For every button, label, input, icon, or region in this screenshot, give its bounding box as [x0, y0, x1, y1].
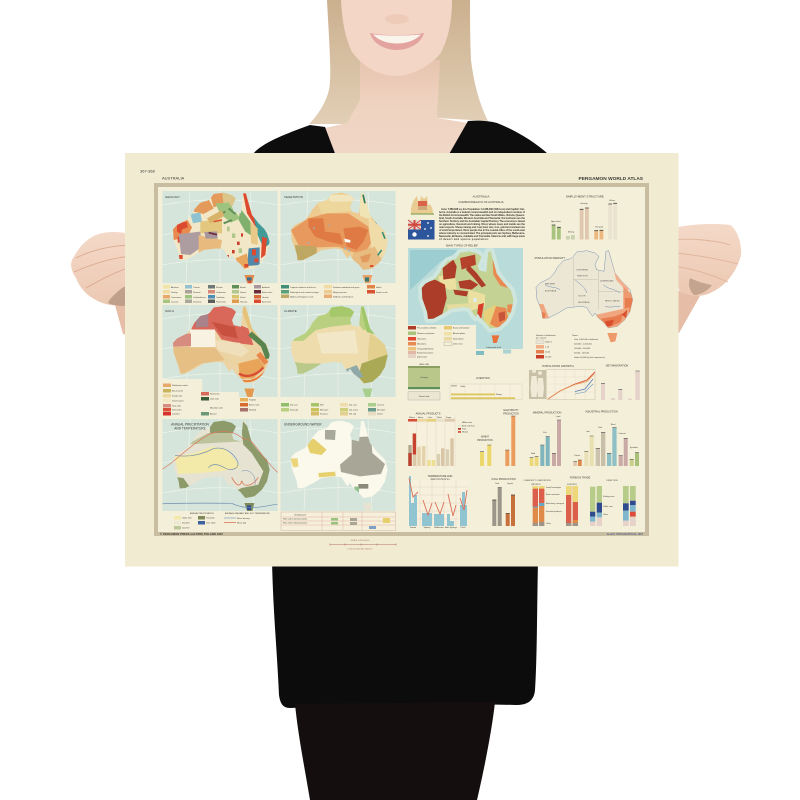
- mineral production heading: MINERAL PRODUCTION: [533, 412, 561, 414]
- relief legend: Volcanoes: [417, 338, 426, 340]
- underground water table: Water used for domestic purposes: [283, 518, 307, 520]
- population density legend: Towns:: [572, 335, 579, 337]
- chart: imports and exports by commodity: IMPORTS: [531, 484, 541, 486]
- soils legend: Laterites: [172, 412, 180, 416]
- chart: imports and exports by commodity: Food, beverages: [546, 487, 561, 489]
- chart: trade direction: Sterling area: [603, 495, 615, 498]
- geology legend: Triassic: [193, 287, 200, 289]
- chart: industrial production: Synthetic: [630, 446, 638, 449]
- soils legend: [162, 379, 259, 416]
- panel: underground water map: [280, 419, 396, 512]
- panel: annual precipitation and temperature map: [162, 419, 278, 511]
- chart: annual products: [408, 415, 455, 468]
- soils legend: Brown soils: [249, 404, 259, 406]
- precipitation legend: AVERAGE JANUARY AND JULY TEMPERATURE: [225, 512, 270, 515]
- geology legend: Jurassic: [171, 301, 178, 303]
- map: population density: NORTHERN: [577, 270, 588, 272]
- population density legend: Under 50,000 (by their importance): [574, 356, 605, 359]
- underground water heading: UNDERGROUND WATER: [284, 422, 322, 426]
- map: population density: AUSTRALIA: [545, 289, 557, 292]
- text block: country description: where industry is concentrated. The principal ports are Sydney, Melbourne,: [439, 231, 525, 235]
- text block: country description: Newcastle, Brisbane, Adelaide and Fremantle. Inland is arid, with large areas: [439, 234, 526, 238]
- chart: mineral production: Gold: [531, 453, 535, 455]
- soils legend: Red loams: [210, 394, 220, 396]
- climate legend: Mountain: [377, 408, 385, 412]
- chart: net immigration: [601, 371, 640, 400]
- panel: geology map: [162, 191, 278, 284]
- chart: industrial production: Cement: [618, 432, 626, 435]
- chart: employment structure: Others: [609, 199, 615, 202]
- geology legend: Schist: [240, 296, 246, 299]
- vegetation legend: Subtropical and coastal eucalypt: [290, 291, 319, 294]
- electricity heading: ELECTRICITY: [504, 410, 519, 412]
- soils legend: Alluvial: [210, 412, 217, 416]
- left hand and arm: [115, 300, 130, 336]
- population density legend: 500,000 - 1,000,000: [574, 344, 593, 346]
- panel: relief map: [408, 248, 523, 358]
- chart: temperature and precipitation: [408, 476, 468, 529]
- nose: [385, 14, 409, 24]
- vegetation legend: Tropical rainforest and forest: [290, 286, 316, 289]
- soils legend: Mountain soils: [210, 406, 223, 410]
- relief legend: Pre-Cambrian shields: [417, 328, 436, 330]
- chart: imports and exports by commodity: Finished products: [546, 510, 562, 513]
- map frame: [156, 185, 647, 534]
- country title: AUSTRALIA: [473, 194, 489, 198]
- map: population density: AUSTRALIA: [578, 301, 590, 304]
- chart: population growth: [547, 370, 595, 400]
- soils legend: Sandy soils: [172, 396, 182, 398]
- precipitation legend: Mean July: [237, 522, 246, 524]
- poster sheet: [125, 153, 678, 566]
- population density legend: Over 1,000,000 inhabitants: [574, 338, 598, 341]
- annual products legend: Mutton: [462, 430, 468, 434]
- relief legend: Depression: [417, 356, 427, 358]
- scale bar: [330, 539, 396, 550]
- black dress below poster: [272, 560, 538, 708]
- tights: [295, 702, 495, 800]
- annual precipitation heading: ANNUAL PRECIPITATION: [171, 422, 210, 426]
- geology legend: Basalt: [240, 286, 246, 289]
- black top: [253, 121, 548, 156]
- precipitation legend: Over 1000: [206, 522, 216, 524]
- geology legend: Proterozoic: [216, 300, 226, 303]
- chart: employment structure: Agriculture: [551, 220, 562, 223]
- chart: trade direction: [590, 480, 636, 526]
- relief legend: Limit of ice: [453, 342, 463, 346]
- industrial production heading: INDUSTRIAL PRODUCTION: [585, 410, 618, 414]
- mouth: [370, 33, 424, 50]
- page number: 367-368: [140, 168, 155, 174]
- map: population density: TERRITORY: [577, 275, 589, 277]
- precipitation legend: 250-500: [182, 522, 190, 524]
- climate legend: Dry, warm: [349, 410, 358, 412]
- soils legend: Podzols: [249, 400, 256, 402]
- chart: imports and exports by commodity: Machinery, transport: [546, 502, 565, 505]
- map: population density: QUEENSLAND: [600, 279, 614, 282]
- chart: mineral production: Lead: [556, 416, 560, 418]
- geology legend: Granite: [262, 296, 269, 299]
- electricity subheading: PRODUCTION: [503, 414, 519, 416]
- soils legend: Grey soils: [172, 406, 181, 408]
- temperature and precipitation heading: TEMPERATURE AND: [428, 475, 452, 478]
- underground water table: Underground: [294, 514, 306, 516]
- chart: annual products: Wheat: [409, 416, 415, 419]
- chart: trade direction: Dollar area: [603, 506, 614, 508]
- annual products legend: Million tons: [462, 421, 472, 424]
- geology legend: Andesite: [262, 286, 271, 289]
- panel: vegetation map: [280, 191, 396, 284]
- map: population density: SOUTH: [578, 295, 586, 297]
- copyright line: © PERGAMON PRESS and PWN, POLAND 1967: [160, 532, 223, 536]
- map: population density: NEW S. WALES: [605, 299, 620, 302]
- soils legend: Red earths: [172, 408, 182, 412]
- vegetation legend: Savanna woodland and grass: [333, 287, 359, 289]
- right hand and arm: [676, 290, 700, 333]
- wheat production heading: WHEAT: [481, 436, 490, 438]
- flag: Australia: [408, 220, 434, 240]
- chart: employment structure: Transport: [595, 226, 604, 228]
- precipitation legend: ANNUAL PRECIPITATION: [190, 512, 214, 515]
- geology legend: Tertiary: [171, 291, 178, 294]
- soils legend: Desert loams: [172, 400, 184, 402]
- chart: electricity production: [505, 416, 515, 466]
- chart: coal production: Lignite: [507, 482, 514, 485]
- climate legend: [281, 403, 385, 416]
- precipitation legend: Mean January: [237, 518, 250, 520]
- scale bar: 0 200 400 600 800 1000 km: [348, 548, 373, 550]
- population density legend: Number of inhabitants: [536, 334, 556, 337]
- population density heading: POPULATION DENSITY: [535, 256, 565, 260]
- chart: trade direction: DIRECTION: [606, 480, 618, 482]
- underground water table: [281, 512, 396, 530]
- chart: employment structure: Mining: [568, 232, 574, 234]
- geology legend: Carboniferous: [193, 297, 206, 299]
- text block: country description: of desert and sparse population.: [439, 237, 489, 241]
- chart: temperature and precipitation: Alice Springs: [445, 526, 457, 529]
- wheat production subheading: PRODUCTION: [477, 440, 493, 442]
- chart: industrial production: Iron: [586, 431, 590, 433]
- chart: industrial production: Cotton: [574, 454, 580, 457]
- population density legend: 50,000 - 100,000: [574, 352, 590, 354]
- geology legend: Ordovician: [216, 292, 226, 294]
- precipitation legend: 750-1000: [206, 518, 215, 520]
- soils legend: Red-brown earths: [172, 384, 188, 387]
- text block: country description: Area: 7,686,848 sq. km. Population: 11,186,000 (1964 est.) and Capital: Can-: [441, 207, 525, 211]
- text block: country description: Northern Territory and the Australian Capital Territory. The economy is based: [439, 219, 525, 223]
- chart: mineral production: Zinc: [543, 432, 547, 434]
- relief legend: Continental shelf: [486, 346, 501, 349]
- population growth heading: POPULATION GROWTH: [542, 364, 574, 368]
- vegetation legend: Desert scrub: [376, 291, 388, 294]
- chart: imports and exports by commodity: Basic materials: [546, 493, 560, 496]
- chart: industrial production: Steel: [611, 423, 616, 426]
- text block: country description: on agriculture, livestock and mining. Wool, wheat, meat, and metals are the: [439, 222, 526, 226]
- chart: temperature and precipitation: Perth: [461, 526, 465, 529]
- neck and chest: [325, 60, 468, 156]
- chart: coal production: [492, 482, 515, 526]
- population density legend: 10-25: [545, 352, 551, 354]
- relief legend: Young folded belts: [417, 348, 433, 350]
- climate legend: Monsoon: [320, 410, 328, 412]
- vegetation legend: Mallee and brigalow scrub: [290, 296, 314, 298]
- geology legend: Alluvium: [171, 286, 179, 289]
- soils legend: Black earths: [172, 390, 183, 392]
- relief legend: Alluvial plains: [453, 332, 465, 335]
- chart: industrial production: Coal: [598, 427, 603, 429]
- chart: imports and exports by commodity: EXPORTS: [567, 484, 577, 486]
- climate legend: Wet: [320, 404, 324, 406]
- scale bar: SCALE 1:40,000,000: [351, 539, 370, 542]
- map: population density: [535, 251, 634, 342]
- chart: annual products: Sugar: [446, 417, 452, 419]
- chart: wheat production: [480, 445, 491, 466]
- chart: rock section: Grazing: [420, 377, 428, 379]
- chart: employment structure: [551, 199, 617, 240]
- geology legend: Volcanic: [240, 301, 247, 303]
- relief heading: MAIN TYPES OF RELIEF: [446, 244, 478, 248]
- chart: annual products: Maize: [418, 417, 424, 419]
- relief legend: Mountains: [417, 342, 426, 346]
- annual products legend: [458, 421, 475, 434]
- population density legend: 1-10: [545, 346, 550, 348]
- climate legend: Dry cool: [290, 404, 298, 406]
- panel: soils map: [162, 305, 278, 398]
- atlas title: PERGAMON WORLD ATLAS: [578, 176, 644, 182]
- map: population density: WESTERN: [545, 284, 555, 286]
- population density legend: [536, 334, 605, 359]
- geology legend: Basic rocks: [262, 292, 272, 294]
- chart: imports and exports by commodity: Other: [546, 522, 551, 525]
- chart: livestock: Cattle: [460, 385, 466, 388]
- chart: imports and exports by commodity: COMMODITY COMPOSITION: [523, 480, 551, 482]
- annual products heading: ANNUAL PRODUCTS: [416, 412, 441, 415]
- chart: livestock: Sheep: [496, 394, 503, 396]
- vegetation legend: [281, 285, 388, 298]
- face: [341, 0, 452, 76]
- geology heading: GEOLOGY: [165, 195, 180, 199]
- page heading: Australia: AUSTRALIA: [162, 176, 185, 180]
- temperature and precipitation subheading: PRECIPITATION: [431, 478, 450, 482]
- coat of arms: [411, 196, 434, 215]
- hair: [309, 0, 488, 124]
- chart: temperature and precipitation: Melbourne: [434, 527, 445, 529]
- climate legend: Semi-dry: [290, 410, 298, 412]
- chart: temperature and precipitation: Sydney: [424, 527, 430, 529]
- geology legend: Silurian: [216, 287, 223, 289]
- chart: rock section: Desert land: [419, 395, 429, 398]
- population density legend: Under 1: [545, 342, 553, 344]
- geology legend: Devonian: [193, 301, 201, 303]
- chart: annual products: Oats: [428, 416, 432, 419]
- text block: country description: land, South Australia, Western Australia and Tasmania; the territories are the: [439, 216, 526, 220]
- climate legend: Oceanic: [377, 404, 384, 406]
- soils legend: Skeletal: [249, 408, 257, 412]
- chart: livestock: [450, 384, 522, 400]
- precipitation legend: [174, 512, 270, 530]
- panel: climate map: [280, 304, 396, 398]
- country subtitle: COMMONWEALTH OF AUSTRALIA: [458, 200, 504, 204]
- livestock heading: LIVESTOCK: [476, 377, 490, 380]
- chart: annual products: Wool: [437, 417, 442, 419]
- geology legend: Gneiss: [240, 292, 246, 294]
- precipitation legend: Under 250: [182, 518, 192, 520]
- climate legend: Hot, dry: [349, 412, 356, 416]
- population density legend: 100,000 - 500,000: [574, 348, 591, 350]
- relief legend: Basin and lowland: [453, 328, 469, 330]
- chart: imports and exports by commodity: [523, 480, 578, 526]
- precipitation legend: 500-750: [182, 528, 190, 530]
- vegetation legend: Mulga savanna: [333, 292, 347, 294]
- chart: industrial production: [573, 423, 639, 466]
- population density legend: per 1 sq km: [536, 338, 547, 340]
- geology legend: Acid rocks: [262, 300, 271, 303]
- geology legend: Cambrian: [216, 297, 225, 299]
- underground water table: Water used for industrial purposes: [283, 522, 307, 524]
- text block: country description: the British Commonwealth. The states are New South Wales, Victoria, Queens-: [439, 213, 525, 217]
- employment heading: EMPLOYMENT STRUCTURE: [566, 194, 604, 198]
- annual precipitation subheading: AND TEMPERATURE: [174, 426, 206, 430]
- annual products legend: Beef and Veal: [462, 426, 475, 428]
- relief legend: Sand dunes: [453, 338, 464, 340]
- text block: country description: of world importance. Most people live in the coastal cities of the south-east: [439, 228, 525, 232]
- vegetation legend: Saltbush and bluebush: [333, 295, 353, 298]
- relief legend: Eroded mountains: [417, 352, 433, 354]
- coal production heading: COAL PRODUCTION: [491, 478, 516, 481]
- chart: trade direction: Other: [603, 513, 608, 516]
- soils heading: SOILS: [165, 309, 174, 313]
- climate legend: Desert: [377, 412, 383, 416]
- text block: country description: [439, 207, 526, 241]
- vegetation heading: VEGETATION: [284, 195, 303, 199]
- climate heading: CLIMATE: [284, 309, 297, 313]
- geology legend: Cretaceous: [171, 296, 181, 299]
- cartographer credit: ALLEN TOPOGRAPHICAL 1967: [607, 533, 644, 536]
- chart: rock section: [408, 363, 440, 400]
- population density legend: 25-100: [545, 356, 552, 358]
- chart: temperature and precipitation: Darwin: [410, 527, 416, 529]
- net immigration heading: NET IMMIGRATION: [606, 364, 628, 368]
- geology legend: Permian: [193, 292, 200, 294]
- relief legend: Plateaux and plains: [417, 332, 434, 335]
- geology legend: [163, 285, 272, 303]
- icon: human figures: [529, 369, 546, 399]
- foreign trade heading: FOREIGN TRADE: [570, 476, 591, 480]
- annual products legend: Pork: [462, 428, 466, 430]
- vegetation legend: Heath: [376, 286, 381, 289]
- climate legend: Dry, cool: [349, 404, 357, 406]
- soils legend: Dark soils: [210, 398, 219, 400]
- relief legend: [408, 325, 523, 358]
- text block: country description: main exports. Sheep raising and coal, lead, zinc, iron, gold and uranium are: [439, 225, 526, 229]
- chart: coal production: Coal: [495, 483, 500, 485]
- chart: mineral production: [530, 416, 561, 466]
- chart: employment structure: Industry: [580, 202, 588, 205]
- chart: rock section: LAND USE: [419, 363, 430, 366]
- climate legend: Savanna: [320, 414, 329, 416]
- text block: country description: berra. Australia is a federal commonwealth and an independent member of: [439, 210, 525, 214]
